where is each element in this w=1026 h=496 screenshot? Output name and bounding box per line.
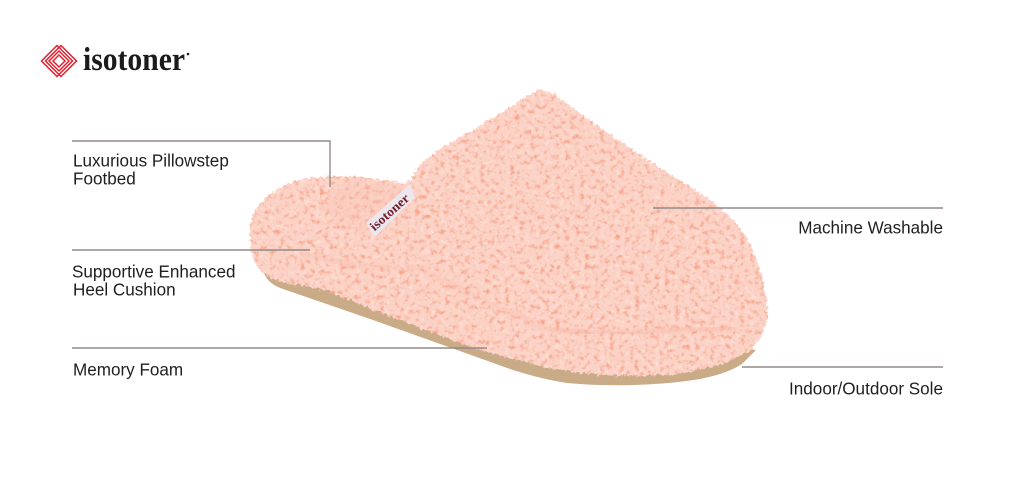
toe seam shading	[548, 328, 736, 333]
callout: Memory Foam: Memory Foam	[73, 360, 183, 380]
slipper fleece body	[250, 90, 767, 376]
brand tag	[366, 184, 415, 237]
heel footbed shading	[318, 178, 408, 232]
callout: Supportive Enhanced Heel Cushion: Supportive Enhanced	[72, 262, 235, 282]
slipper illustration	[250, 90, 767, 385]
callout: Luxurious Pillowstep Footbed	[72, 141, 330, 188]
callout: Machine Washable: Machine Washable	[798, 218, 943, 238]
icon: red nested diamonds	[42, 46, 76, 76]
logo wordmark: isotoner	[83, 42, 185, 78]
callout: Indoor/Outdoor Sole: Indoor/Outdoor Sole	[789, 380, 943, 398]
registered mark	[187, 53, 189, 55]
callout: Luxurious Pillowstep Footbed: Luxurious Pillowstep	[73, 152, 229, 170]
callout: Supportive Enhanced Heel Cushion	[72, 250, 310, 300]
callout: Luxurious Pillowstep Footbed: Footbed	[73, 170, 136, 188]
brand tag text: isotoner	[366, 190, 412, 234]
logo: isotoner	[42, 42, 189, 78]
slipper sole	[264, 273, 756, 385]
foxing band shading	[300, 252, 548, 329]
callout: Supportive Enhanced Heel Cushion: Heel Cushion	[73, 280, 176, 300]
